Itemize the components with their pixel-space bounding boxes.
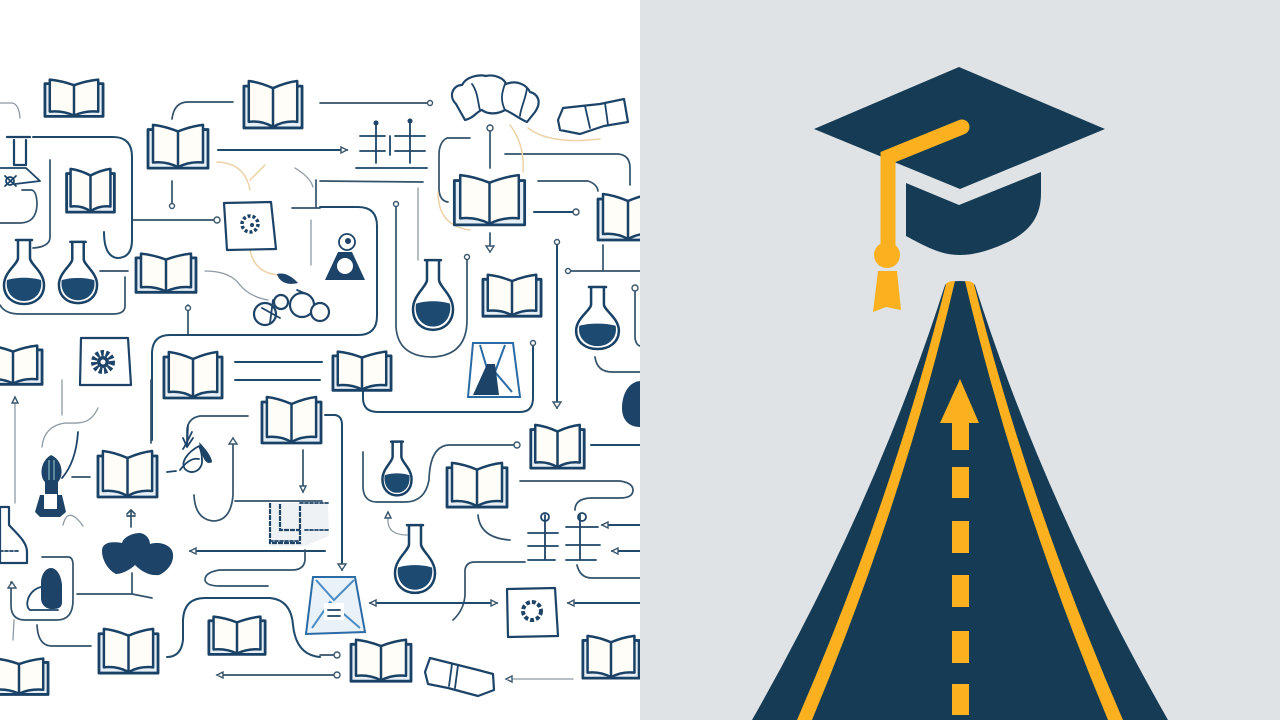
icon: flask (576, 287, 619, 349)
tassel cord (888, 127, 962, 245)
icon: book (262, 397, 321, 443)
dashed centre line (952, 467, 969, 715)
icon: small cross marker (127, 510, 135, 516)
icon: book (0, 659, 48, 694)
icon: flask cropped at left edge (0, 507, 27, 563)
icon: dark flask cropped at right edge (622, 381, 640, 427)
icon: berries (254, 273, 329, 325)
icon: book (99, 629, 158, 673)
icon: book (454, 175, 525, 225)
icon: cross measuring tool (528, 513, 600, 560)
right road edge line (965, 281, 1123, 720)
icon: book (67, 169, 114, 212)
tassel knot (874, 242, 900, 268)
icon: book (351, 640, 411, 681)
icon: microscope (0, 137, 40, 186)
left road edge line (797, 281, 955, 720)
icon: book (136, 254, 196, 292)
icon: book (45, 80, 103, 116)
icon: blue flask sketch (468, 343, 520, 397)
icon: flask (395, 525, 435, 593)
icon: dark bottle (35, 455, 66, 517)
icon: chemistry bottle in rounded box (325, 234, 365, 280)
icon: book (583, 636, 639, 678)
icon: flask (59, 242, 97, 303)
icon: gear card (507, 588, 558, 637)
icon: book (483, 275, 541, 316)
icon: flask (382, 442, 412, 495)
icon: book (244, 81, 302, 128)
icon: book (148, 125, 208, 168)
road (752, 281, 1168, 720)
tassel fringe (873, 271, 901, 312)
icon: flask (413, 260, 453, 330)
icon: graduation cap (814, 67, 1105, 312)
up arrow on road (940, 379, 979, 450)
icon: book (333, 352, 391, 390)
icon: flask (4, 240, 44, 304)
icon: book (531, 425, 584, 468)
icon: cloud shapes (452, 75, 539, 122)
icon: dark bottle in box (27, 568, 62, 610)
icon: book (447, 463, 507, 507)
icon: pen nib and loop (167, 425, 212, 472)
icon: book (598, 194, 658, 240)
icon: book (209, 617, 265, 654)
icon: scroll (558, 99, 628, 134)
icon: book (98, 451, 157, 497)
panel: left, network of books and flasks (0, 0, 640, 720)
icon: blue flask sketch (306, 577, 365, 634)
icon: sketched square (270, 503, 329, 546)
icon: blue hearts (102, 533, 173, 575)
connector end markers (8, 100, 638, 682)
icon: gear card (224, 202, 276, 250)
panel: right, road to graduation (640, 0, 1280, 720)
icon: book (164, 352, 222, 398)
connector lines (0, 102, 640, 679)
icon: book (0, 346, 42, 384)
icon: cross measuring tool (356, 118, 427, 168)
cap board (814, 67, 1105, 189)
icon: scroll (425, 658, 494, 696)
icon: sun gear card (80, 338, 131, 385)
cap base (906, 172, 1041, 255)
